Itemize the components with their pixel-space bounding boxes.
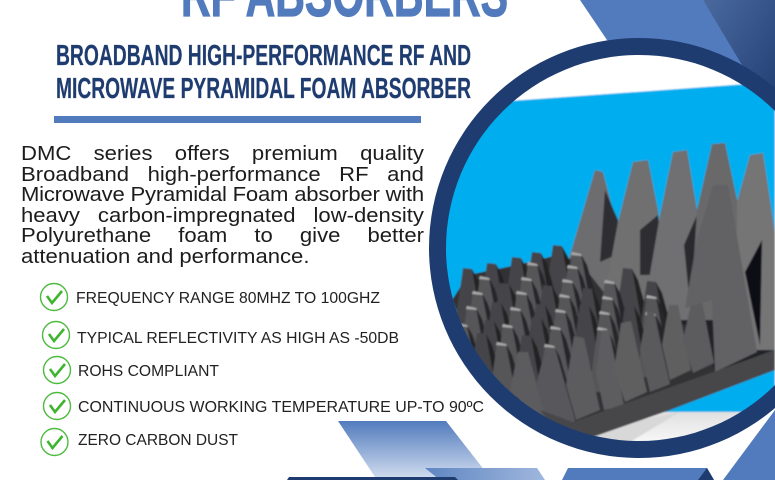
feature: zero carbon dust: ZERO CARBON DUST — [78, 432, 238, 449]
bottom shape: blue trapezoid — [562, 468, 714, 480]
bottom shape: dark corner — [698, 468, 714, 480]
description paragraph: attenuation and performance. — [21, 246, 309, 268]
description paragraph: Microwave Pyramidal Foam absorber with — [21, 184, 424, 206]
front row of pyramids — [512, 351, 546, 417]
feature: frequency range — [40, 284, 380, 310]
large rear pyramids — [568, 169, 613, 292]
feature: working temperature — [44, 392, 484, 420]
description paragraph — [21, 143, 424, 268]
dark base behind small pyramids — [452, 255, 715, 438]
subtitle: MICROWAVE PYRAMIDAL FOAM ABSORBER — [56, 73, 471, 105]
bottom right triangle — [723, 410, 775, 480]
feature: frequency range: FREQUENCY RANGE 80MHZ TO 100GHZ — [76, 290, 380, 307]
feature: zero carbon dust — [41, 428, 238, 456]
top right shape: blue wedge — [580, 0, 775, 180]
feature: working temperature: CONTINUOUS WORKING TEMPERATURE UP-TO 90ºC — [78, 399, 484, 416]
bottom shape: fading parallelogram — [338, 421, 492, 480]
description paragraph: heavy carbon-impregnated low-density — [21, 205, 424, 227]
foam base strip — [540, 350, 775, 438]
bottom shape: navy bar — [287, 477, 458, 480]
subtitle: BROADBAND HIGH-PERFORMANCE RF AND — [56, 40, 471, 72]
product photo in circular frame — [429, 38, 775, 460]
rear rows of small pyramids — [549, 244, 570, 298]
large front pyramid — [686, 238, 758, 372]
top right shape: navy wedge — [703, 0, 775, 120]
description paragraph: Broadband high-performance RF and — [21, 164, 424, 186]
description paragraph: DMC series offers premium quality — [21, 143, 424, 165]
feature: RoHS — [44, 356, 219, 384]
feature: reflectivity — [42, 322, 399, 348]
dark base behind large pyramids — [680, 318, 774, 372]
feature: reflectivity: TYPICAL REFLECTIVITY AS HIGH AS -50DB — [77, 330, 399, 347]
feature list — [40, 284, 484, 456]
feature: RoHS: ROHS COMPLIANT — [78, 363, 219, 380]
circular navy frame — [429, 38, 775, 458]
photo of pyramidal foam absorber — [440, 50, 775, 460]
description paragraph: Polyurethane foam to give better — [21, 225, 424, 247]
subtitle — [56, 40, 471, 105]
bottom shape: second parallelogram — [425, 468, 545, 480]
divider bar under subtitle — [54, 116, 421, 123]
